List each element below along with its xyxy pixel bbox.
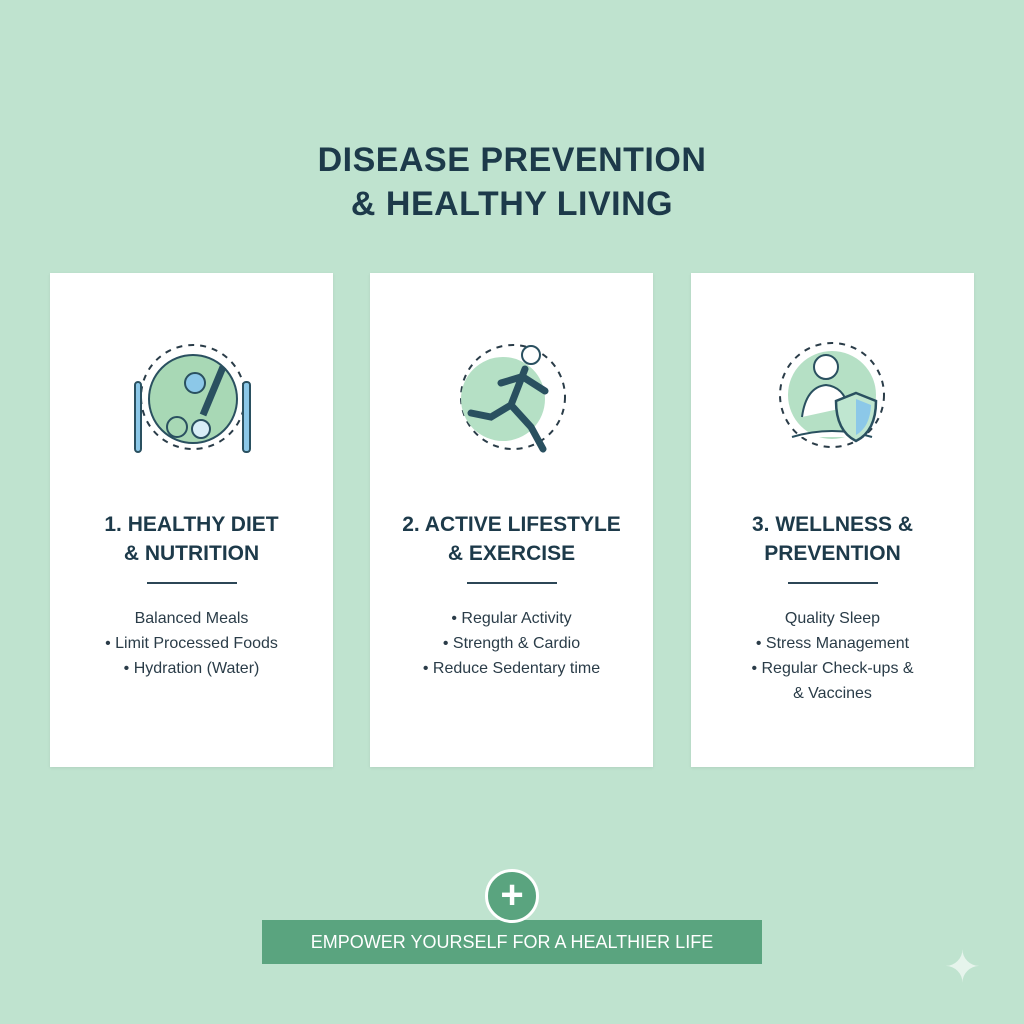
icon: sparkle: ✦ [944,943,981,992]
banner: EMPOWER YOURSELF FOR A HEALTHIER LIFE [311,932,713,952]
heading: 3. WELLNESS & [752,513,913,536]
list: • Hydration (Water) [124,660,259,677]
icon: plate [134,344,251,453]
list: • Regular Activity [451,610,572,627]
heading: 1. HEALTHY DIET [104,513,279,536]
icon: plus circle: + [500,873,524,917]
heading [104,513,279,565]
heading: & NUTRITION [124,542,259,565]
heading: 2. ACTIVE LIFESTYLE [402,513,621,536]
heading: PREVENTION [764,542,901,565]
title: DISEASE PREVENTION [318,141,706,179]
icon: runner [460,344,566,452]
list: • Reduce Sedentary time [423,660,600,677]
title: & HEALTHY LIVING [351,185,673,223]
heading [752,513,913,565]
list: • Strength & Cardio [443,635,580,652]
list: • Limit Processed Foods [105,635,278,652]
heading: & EXERCISE [448,542,575,565]
list [751,610,914,702]
icon: shield person [779,342,885,448]
list [105,610,278,677]
list: Quality Sleep [785,610,880,627]
list: Balanced Meals [135,610,248,627]
panel: diet [50,273,333,767]
list: • Regular Check-ups & [751,660,914,677]
list [423,610,600,677]
panel: active [370,273,653,767]
title [318,141,706,223]
panel: wellness [691,273,974,767]
list: & Vaccines [793,685,872,702]
list: • Stress Management [756,635,909,652]
heading [402,513,621,565]
icon: plus circle [485,869,539,923]
banner [262,920,762,964]
